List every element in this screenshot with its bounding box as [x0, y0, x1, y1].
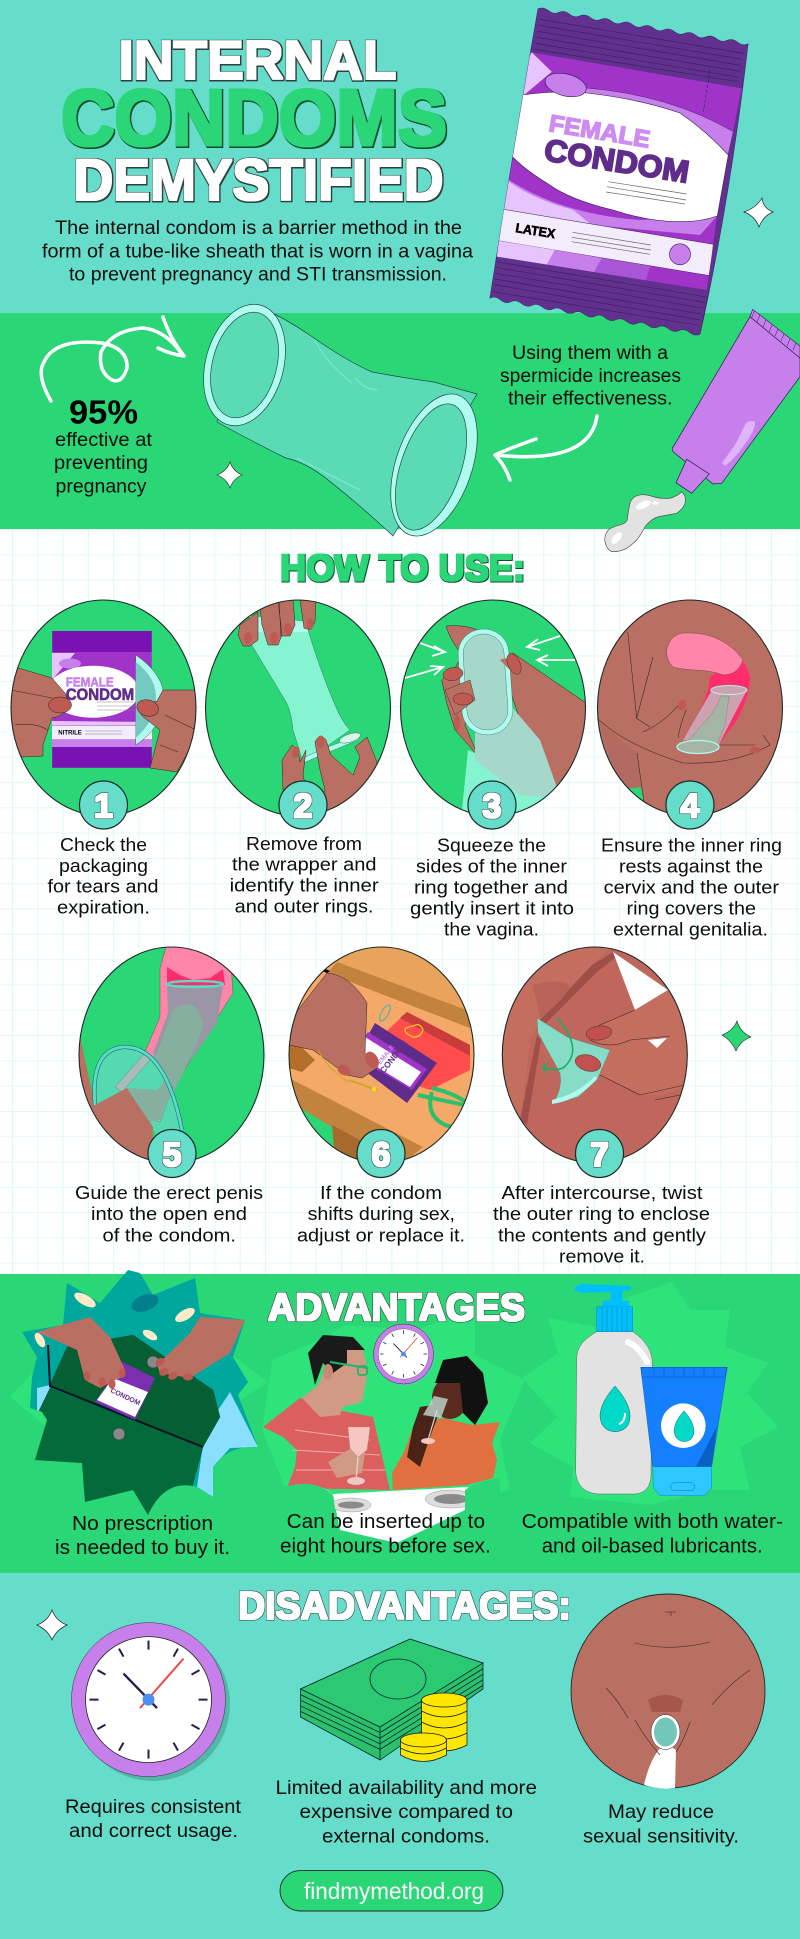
step 7: twist outer ring and remove	[493, 945, 710, 1266]
text: step 4: rests against the	[619, 856, 763, 876]
background: green effectiveness band	[0, 313, 800, 529]
icon: green sparkle	[722, 1021, 751, 1051]
text: advantage 1: No prescription	[72, 1512, 213, 1535]
illustration: female condom wrapper	[490, 8, 748, 336]
step 2: remove from wrapper	[205, 600, 391, 916]
title: CONDOMS	[61, 73, 447, 162]
illustration: internal condom with rings	[191, 295, 494, 547]
icon: sparkle in disadvantages	[37, 1610, 67, 1640]
text: advantage 2: eight hours before sex.	[280, 1535, 491, 1558]
badge: number 4	[666, 781, 714, 829]
illustration: female condom wrapper: LATEX	[515, 220, 557, 241]
text: step 1: for tears and	[48, 877, 158, 897]
text: spermicide note	[500, 343, 681, 410]
background: white grid how-to section	[0, 529, 800, 1274]
text: advantage 3	[522, 1510, 783, 1558]
text: spermicide note: Using them with a	[512, 343, 668, 364]
text: step 3: sides of the inner	[416, 856, 567, 876]
text: step 2: Remove from	[246, 834, 362, 854]
advantage: wallet illustration	[22, 1270, 258, 1515]
text: step 4	[601, 835, 782, 939]
heading: disadvantages: DISADVANTAGES:	[238, 1585, 571, 1628]
text: step 4: Ensure the inner ring	[601, 835, 782, 855]
arrow: spermicide to condom	[495, 416, 597, 480]
text: disadvantage 1	[65, 1796, 242, 1842]
text: disadvantage 3: sexual sensitivity.	[583, 1826, 739, 1848]
text: disadvantage 3	[583, 1801, 739, 1848]
step 4: inner ring rests against cervix	[597, 600, 783, 939]
title	[61, 29, 447, 213]
text: step 3	[410, 835, 574, 939]
text: step 1	[48, 835, 158, 918]
illustration: spermicide tube	[605, 309, 800, 552]
badge: number 6	[357, 1130, 405, 1178]
intro text: form of a tube-like sheath that is worn in a vagina	[42, 242, 473, 262]
step 6: adjust or replace in drawer: CONDOM	[378, 1039, 409, 1075]
text: 95 percent effective: pregnancy	[56, 476, 147, 498]
illustration: female condom wrapper: FEMALE	[547, 110, 652, 154]
text: disadvantage 2: Limited availability and more	[276, 1777, 537, 1799]
text: step 3: ring together and	[414, 878, 568, 898]
text: disadvantage 2: expensive compared to	[300, 1801, 513, 1823]
text: step 5: into the open end	[91, 1204, 247, 1224]
text: disadvantage 1: Requires consistent	[65, 1796, 242, 1818]
badge: number 6: 6	[372, 1136, 390, 1174]
heading: advantages: ADVANTAGES	[268, 1286, 525, 1330]
text: advantage 2	[280, 1510, 491, 1558]
text: advantage 2: Can be inserted up to	[287, 1510, 485, 1533]
text: 95 percent effective: preventing	[54, 453, 148, 474]
illustration: wall clock	[374, 1324, 435, 1386]
step 5: guide penis into open end	[70, 945, 265, 1246]
background: teal header	[0, 0, 800, 313]
burst: light green behind couple	[262, 1310, 525, 1500]
text: step 4: external genitalia.	[613, 919, 768, 939]
step 6: adjust or replace in drawer: FEMALE	[374, 1043, 396, 1069]
illustration: female condom wrapper: CONDOM	[542, 132, 692, 190]
step 1: check packaging: FEMALE	[66, 676, 114, 690]
text: step 3: the vagina.	[444, 919, 539, 939]
badge: number 1: 1	[94, 788, 113, 826]
text: spermicide note: spermicide increases	[500, 366, 681, 387]
badge: number 3	[468, 781, 516, 829]
text: step 1: Check the	[60, 835, 147, 855]
intro text: to prevent pregnancy and STI transmission.	[69, 264, 447, 286]
title: DEMYSTIFIED	[74, 148, 444, 213]
text: step 2: the wrapper and	[232, 855, 376, 875]
text: step 3: gently insert it into	[410, 899, 574, 919]
badge: number 2	[279, 781, 327, 829]
step 1: check packaging: CONDOM	[66, 686, 134, 704]
badge: number 4: 4	[681, 788, 700, 826]
step 3: squeeze inner ring	[400, 600, 586, 939]
text: disadvantage 2	[276, 1777, 537, 1848]
icon: sparkle on green band	[217, 462, 242, 488]
text: step 6: shifts during sex,	[308, 1204, 455, 1224]
arrow: swirl to condom	[41, 317, 184, 401]
badge: number 7	[576, 1130, 624, 1178]
heading: how to use: HOW TO USE:	[280, 548, 525, 588]
advantage: wallet illustration: CONDOM	[109, 1387, 141, 1407]
text: step 7: the contents and gently	[498, 1226, 706, 1246]
text: step 7: After intercourse, twist	[502, 1183, 702, 1203]
icon: sparkle near wrapper	[744, 198, 773, 227]
text: step 6: If the condom	[320, 1183, 442, 1203]
title: INTERNAL	[118, 29, 396, 91]
text: 95 percent effective: effective at	[55, 430, 153, 451]
text: step 2	[230, 834, 379, 916]
badge: number 5: 5	[163, 1136, 181, 1174]
step 1: check packaging: NITRILE	[58, 730, 82, 736]
advantage: couple at table illustration	[263, 1324, 500, 1543]
text: step 2: and outer rings.	[235, 896, 374, 916]
intro text	[42, 218, 473, 286]
website pill: findmymethod.org	[304, 1878, 484, 1904]
website pill	[280, 1871, 503, 1911]
text: step 1: expiration.	[57, 898, 150, 918]
badge: number 7: 7	[590, 1136, 609, 1174]
badge: number 2: 2	[294, 788, 312, 826]
intro text: The internal condom is a barrier method in the	[55, 218, 462, 239]
step 6: adjust or replace in drawer	[285, 940, 480, 1246]
burst: light green behind wallet	[10, 1355, 268, 1430]
advantage: lubricant bottle and tube	[575, 1284, 727, 1496]
text: advantage 3: and oil-based lubricants.	[542, 1535, 763, 1558]
text: step 7: the outer ring to enclose	[493, 1204, 710, 1224]
illustration: vulva with outer ring	[571, 1594, 765, 1789]
text: advantage 1	[55, 1512, 230, 1559]
background: teal disadvantages section	[0, 1573, 800, 1939]
badge: number 1	[80, 781, 128, 829]
text: step 6: adjust or replace it.	[297, 1226, 465, 1246]
text: step 2: identify the inner	[230, 876, 379, 896]
text: 95 percent effective	[54, 394, 153, 498]
text: step 5: of the condom.	[102, 1226, 236, 1246]
text: advantage 3: Compatible with both water-	[522, 1510, 783, 1533]
background: green advantages band	[0, 1274, 800, 1573]
text: 95 percent effective: 95%	[69, 394, 138, 430]
text: step 7: remove it.	[559, 1246, 645, 1266]
illustration: cash stack and coins	[300, 1639, 483, 1762]
text: step 1: packaging	[59, 856, 148, 876]
text: step 3: Squeeze the	[437, 835, 546, 855]
badge: number 3: 3	[483, 788, 501, 826]
text: step 6	[297, 1183, 465, 1246]
badge: number 5	[148, 1130, 196, 1178]
text: step 4: cervix and the outer	[604, 878, 779, 898]
text: disadvantage 3: May reduce	[608, 1801, 714, 1823]
text: disadvantage 1: and correct usage.	[69, 1820, 238, 1842]
illustration: large clock	[72, 1623, 230, 1781]
step 1: check packaging	[0, 600, 200, 918]
text: step 7	[493, 1183, 710, 1266]
text: step 5	[75, 1183, 263, 1246]
text: advantage 1: is needed to buy it.	[55, 1536, 230, 1559]
text: spermicide note: their effectiveness.	[508, 388, 672, 410]
burst: light green behind bottles	[522, 1282, 778, 1505]
text: disadvantage 2: external condoms.	[322, 1826, 490, 1848]
text: step 4: ring covers the	[626, 899, 756, 919]
text: step 5: Guide the erect penis	[75, 1183, 263, 1203]
